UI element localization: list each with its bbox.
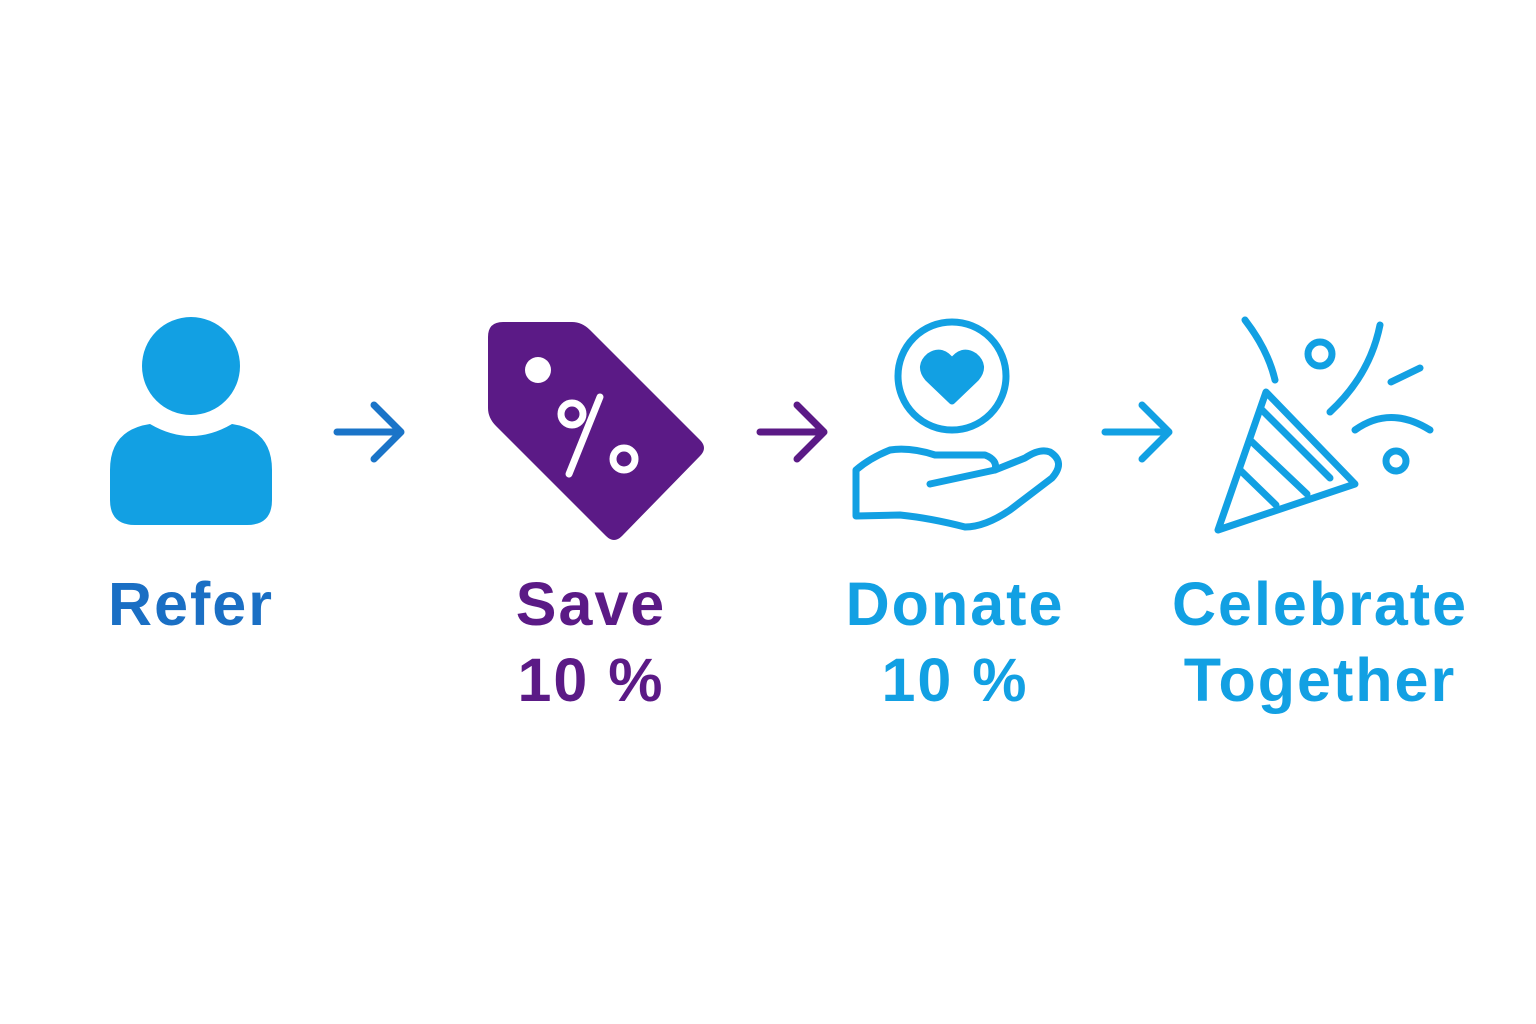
text: Celebrate Together: Together (1184, 646, 1456, 714)
text: Save 10%: Save (516, 570, 666, 638)
icon: party popper (1218, 320, 1430, 530)
icon: donate hand (856, 322, 1059, 527)
text: Donate 10%: 10 % (881, 646, 1029, 714)
arrow 2 (760, 405, 824, 459)
text: Refer: Refer (108, 570, 274, 638)
text: Donate 10%: Donate (846, 570, 1064, 638)
text: Donate 10% (846, 570, 1064, 714)
arrow 1 (337, 405, 401, 459)
arrow 3 (1105, 405, 1169, 459)
text: Celebrate Together (1172, 570, 1468, 714)
text: Celebrate Together: Celebrate (1172, 570, 1468, 638)
text: Save 10%: 10 % (517, 646, 665, 714)
icon: person (110, 317, 272, 525)
icon: price tag (488, 322, 704, 540)
text: Save 10% (516, 570, 666, 714)
